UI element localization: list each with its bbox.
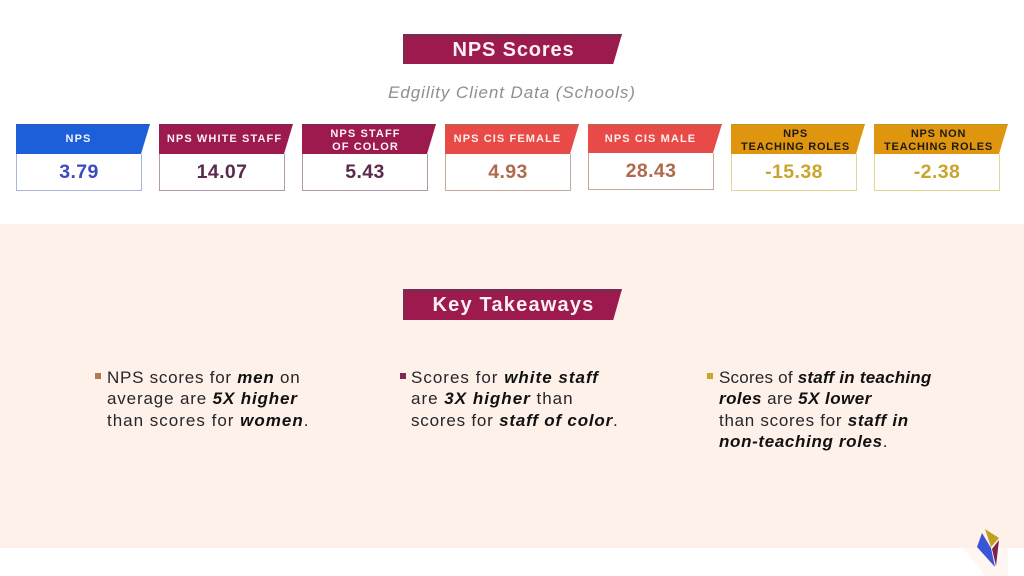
card: NPS non teaching roles: NPS NON — [911, 128, 966, 140]
subtitle: Edgility Client Data (Schools) — [388, 83, 636, 102]
card: NPS white staff: NPS WHITE STAFF — [167, 133, 282, 145]
card: NPS — [16, 124, 150, 191]
card: NPS: NPS — [66, 133, 91, 145]
takeaway text — [411, 368, 619, 430]
bullet — [95, 373, 101, 379]
card: NPS teaching roles: TEACHING ROLES — [741, 141, 850, 153]
takeaway text: roles are 5X lower — [719, 389, 872, 408]
card: NPS cis male — [588, 124, 722, 190]
card: NPS cis male: NPS CIS MALE — [605, 133, 696, 145]
takeaway text: average are 5X higher — [107, 389, 298, 408]
card: NPS non teaching roles: TEACHING ROLES — [884, 141, 993, 153]
takeaway text — [719, 368, 932, 451]
takeaway text: than scores for staff in — [719, 411, 909, 430]
heading: Key Takeaways: Key Takeaways — [432, 294, 594, 316]
card: NPS non teaching roles: -2.38 — [914, 161, 960, 183]
card: NPS teaching roles: -15.38 — [765, 161, 823, 183]
card: NPS cis female: NPS CIS FEMALE — [454, 133, 561, 145]
logo backdrop — [964, 548, 1008, 576]
card: NPS non teaching roles — [874, 124, 1008, 191]
card: NPS staff of color: OF COLOR — [332, 141, 399, 153]
title: NPS Scores: NPS Scores — [453, 39, 574, 61]
bullet — [707, 373, 713, 379]
card: NPS cis female: 4.93 — [488, 161, 528, 183]
takeaway: men vs women — [95, 368, 309, 430]
bullet — [400, 373, 406, 379]
takeaway text: NPS scores for men on — [107, 368, 300, 387]
card: NPS: 3.79 — [59, 161, 99, 183]
panel: key takeaways background — [0, 224, 1024, 548]
card: NPS white staff: 14.07 — [197, 161, 247, 183]
takeaway text: scores for staff of color. — [411, 411, 619, 430]
title: NPS Scores — [403, 34, 622, 64]
card: NPS white staff — [159, 124, 293, 191]
card: NPS teaching roles — [731, 124, 865, 191]
icon: Edgility logo — [977, 529, 999, 567]
card: NPS staff of color: NPS STAFF — [330, 128, 401, 140]
takeaway text: Scores of staff in teaching — [719, 368, 932, 387]
takeaway text: Scores for white staff — [411, 368, 599, 387]
card: NPS staff of color — [302, 124, 436, 191]
takeaway text: non-teaching roles. — [719, 432, 888, 451]
takeaway: teaching vs non-teaching roles — [707, 368, 932, 451]
card: NPS teaching roles: NPS — [783, 128, 808, 140]
takeaway text — [107, 368, 309, 430]
card: NPS staff of color: 5.43 — [345, 161, 385, 183]
heading: Key Takeaways — [403, 289, 622, 320]
card: NPS cis female — [445, 124, 579, 191]
takeaway: white staff vs staff of color — [400, 368, 619, 430]
takeaway text: are 3X higher than — [411, 389, 574, 408]
card: NPS cis male: 28.43 — [626, 160, 676, 182]
takeaway text: than scores for women. — [107, 411, 309, 430]
